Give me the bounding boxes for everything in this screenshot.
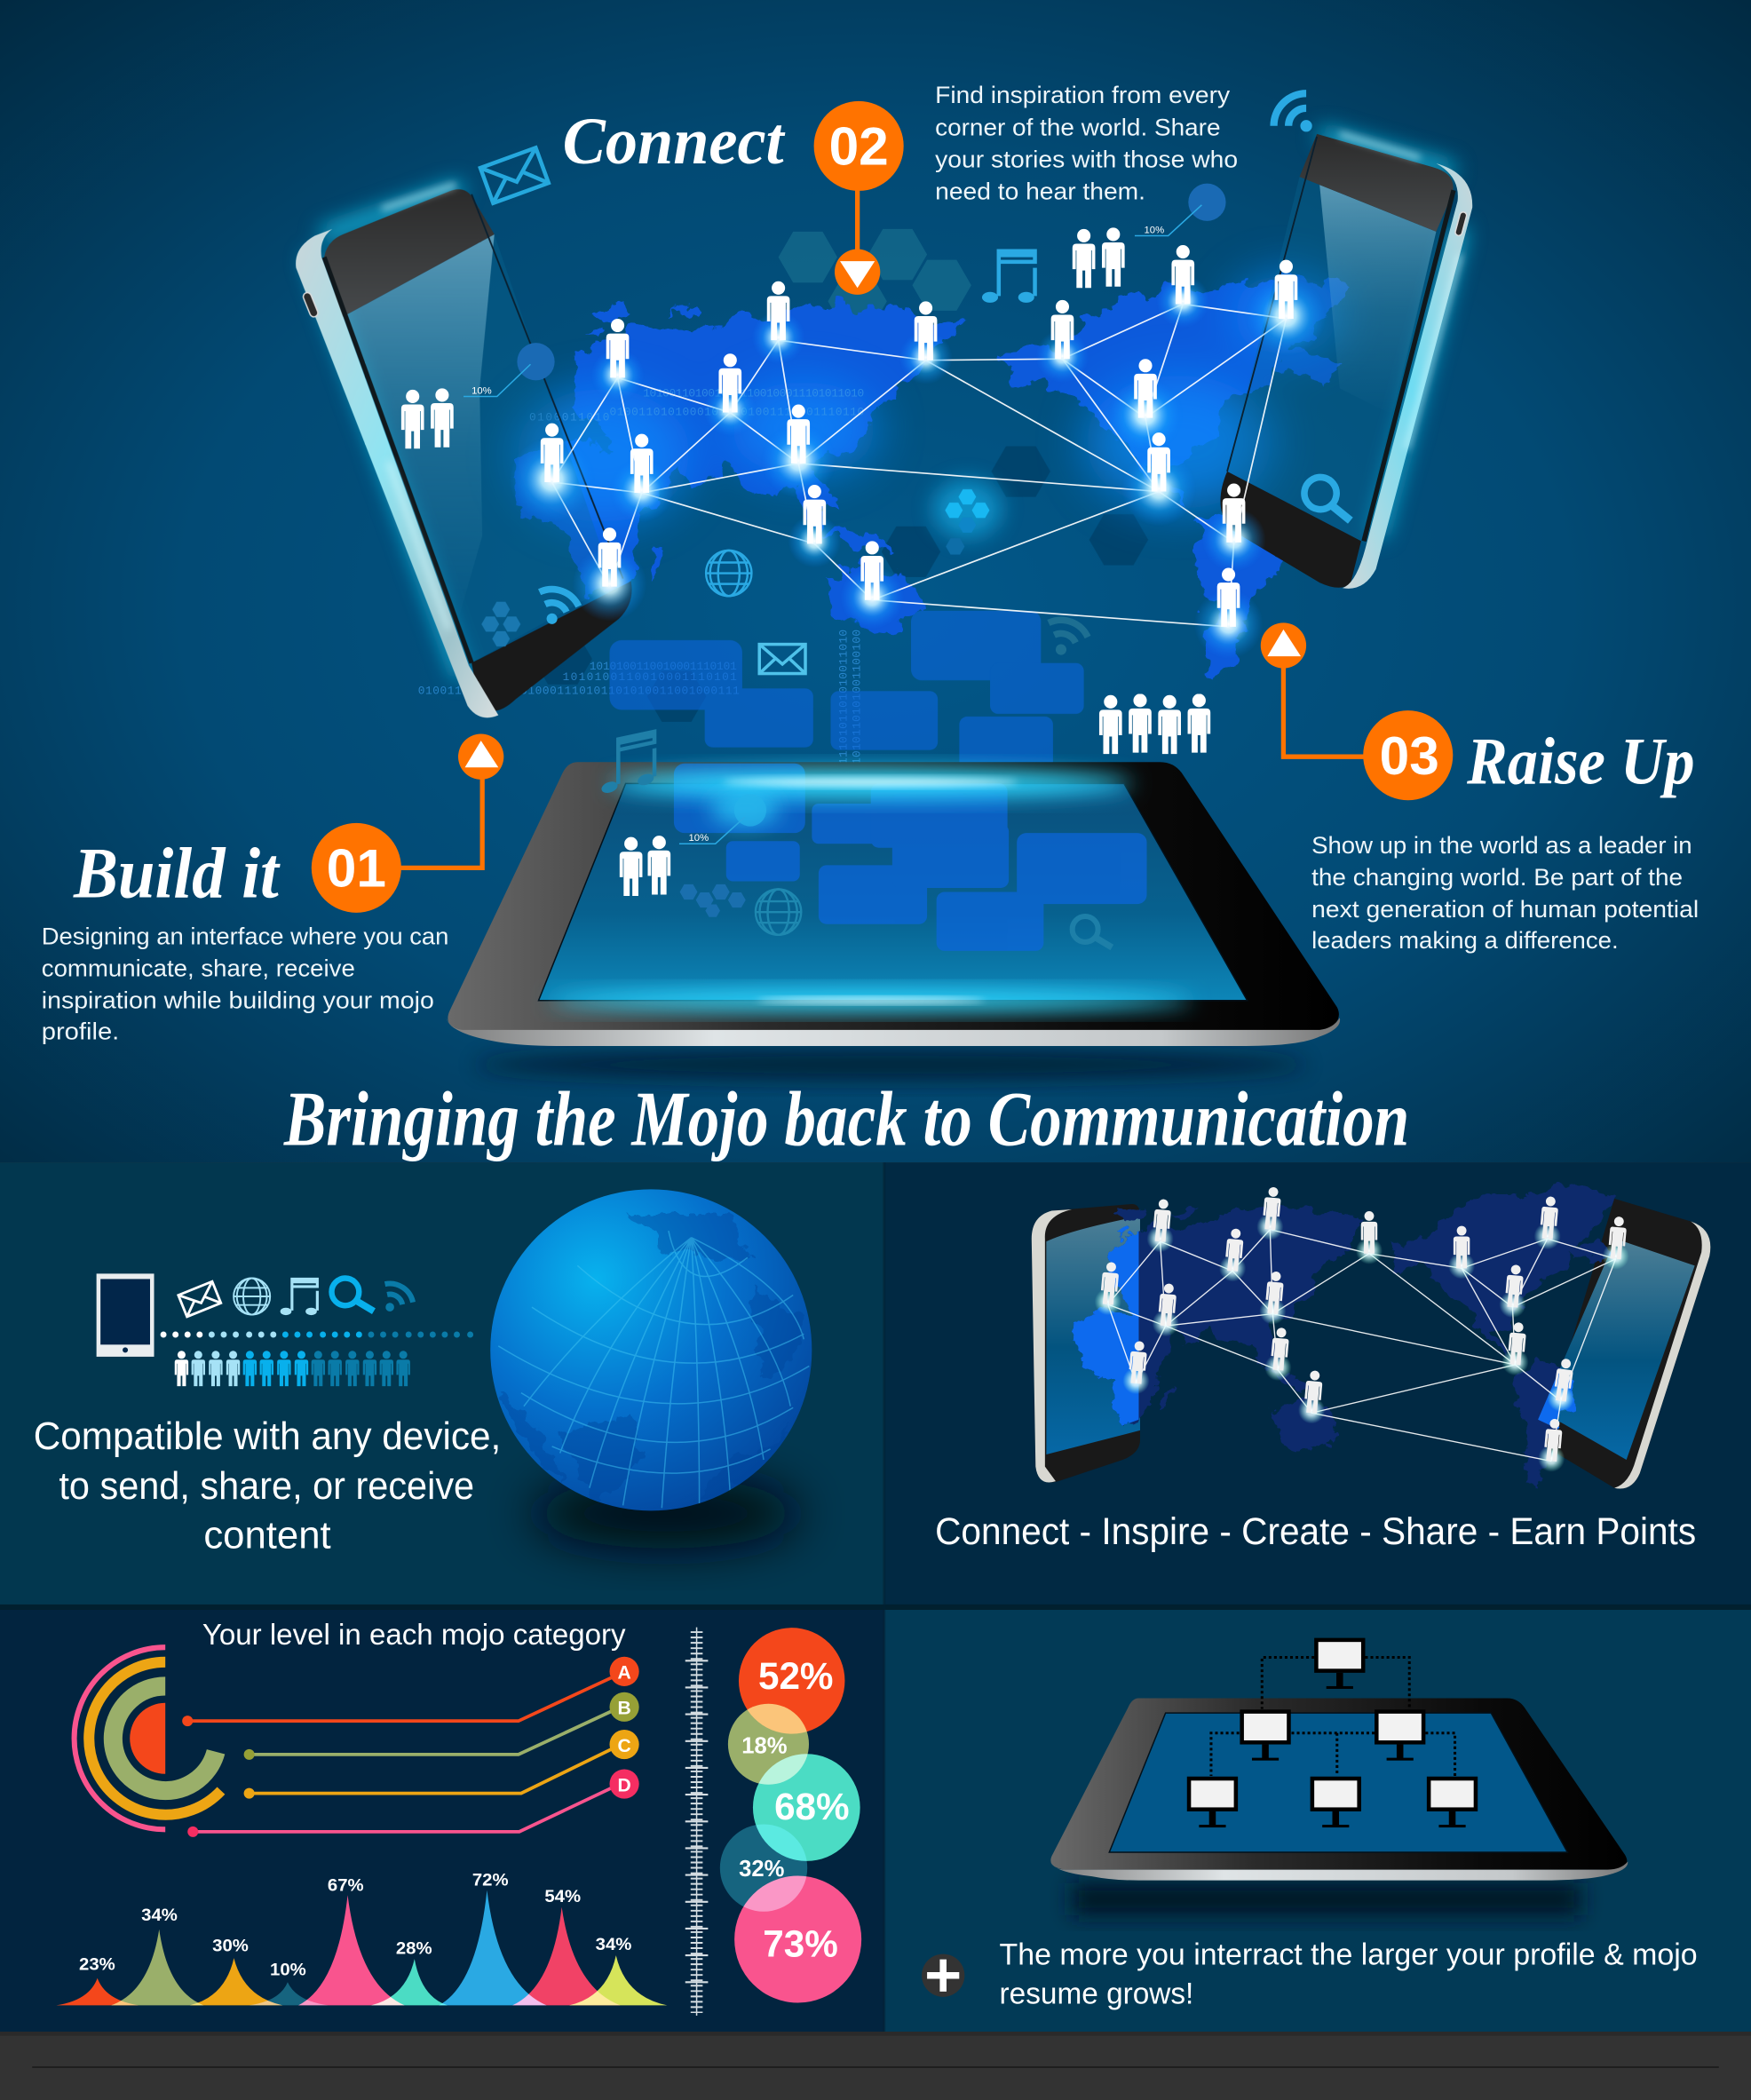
icon: music light [281,1278,319,1315]
icon: wifi left phone [535,580,581,626]
peak labels: 34% [596,1935,631,1954]
hexagon decorations [779,229,971,327]
binary code: 1010100110010001110101 [563,670,737,684]
heading: Connect: Connect [563,105,786,178]
bubble labels: 32% [739,1857,785,1882]
right phone [1220,134,1472,589]
icon: wifi right phone [1274,93,1312,131]
text: Build it description [42,923,448,1044]
left phone bottom band [471,582,632,711]
right phone side button [1454,211,1467,236]
small world map dark [1072,1185,1620,1486]
right phone bottom band [1220,472,1361,588]
tablet rim [1050,1862,1628,1881]
left phone right edge [471,194,623,579]
text: profile description: The more you interract the larger your profile & mojo [1000,1938,1698,1972]
dim dark hexagons [534,446,1148,722]
people pair on left phone [401,388,454,448]
heading: your level: Your level in each mojo category [202,1619,626,1652]
left phone silver edge [296,229,498,717]
tablet cards [674,764,1147,951]
small left phone [1032,1204,1140,1482]
legend line D [187,1769,639,1837]
tablet glow bottom [550,990,1192,1011]
icon: globe center [706,551,751,596]
text: Connect description [935,82,1238,205]
people pair on tablet [620,836,670,896]
peak labels: 54% [544,1887,581,1906]
peak labels: 28% [396,1939,432,1959]
icon: music top [982,250,1037,303]
binary code [418,386,864,857]
left phone side button [302,291,319,318]
text: Connect description: your stories with those who [935,147,1238,173]
text: Build it description: communicate, share, receive [42,955,355,982]
tablet glow bottom core [757,998,985,1003]
ten percent marker tablet: 10% [689,833,709,844]
right phone glass reflection [1319,185,1436,416]
bubble labels [739,1655,850,1965]
legend line B [244,1692,639,1760]
icon: wifi teal [381,1280,414,1312]
hero section [0,0,1751,1162]
legend line D: D [617,1775,631,1795]
text: Raise Up description: Show up in the world as a leader in [1311,832,1692,859]
hero background [0,0,1751,1162]
peak labels: 72% [472,1871,509,1890]
peak labels [79,1871,631,1980]
ruler scale [685,1628,708,2016]
legend line C: C [617,1736,631,1756]
people pair top [1073,227,1125,288]
text: Raise Up description [1311,832,1699,954]
icon: magnifier tablet [1073,916,1112,947]
floating blue cards [610,611,1084,770]
binary code: 01001101010001010101001110001110110 [610,406,864,419]
network people [541,245,1297,627]
peak chart [56,1890,667,2005]
text: Connect description: corner of the world. Share [935,114,1221,140]
ten percent marker right: 10% [1145,225,1164,235]
tablet shadow [476,1049,1306,1081]
small connection lines [1108,1230,1616,1462]
hexagon cluster left phone [481,602,520,646]
left phone edge highlight [382,185,456,630]
monitors [1189,1640,1476,1827]
radial rings chart [75,1647,221,1829]
tablet shadow [1072,1883,1581,1915]
text: Raise Up description: the changing world. Be part of the [1311,864,1683,891]
text: Build it description: inspiration while building your mojo [42,987,434,1014]
text: Build it description: Designing an interface where you can [42,923,448,949]
peak labels: 23% [79,1955,115,1975]
node glows [509,274,1327,659]
bubble labels: 68% [774,1786,850,1827]
right phone screen [1227,177,1436,541]
heading: Raise Up: Raise Up [1466,725,1695,798]
callout 01 [312,734,503,913]
callout 03: 03 [1380,725,1439,786]
connection lines [552,304,1286,627]
globe [490,1189,812,1510]
right phone left edge [1227,137,1317,472]
panel background [884,1610,1751,2032]
text: Raise Up description: next generation of human potential [1311,896,1699,923]
tablet rim [446,1018,1340,1046]
globe shadow [532,1478,800,1549]
peak labels: 34% [141,1906,178,1925]
tablet frame [448,762,1339,1031]
panel: connect network [884,1162,1751,1607]
right phone edge highlight [1340,134,1461,448]
text: Connect description: Find inspiration from every [935,82,1231,108]
peak labels: 30% [212,1937,249,1956]
peak labels: 67% [328,1876,364,1896]
tablet glow top core [724,778,1018,786]
legend line A: A [617,1663,631,1684]
ten percent marker right [1135,184,1226,235]
bubble chart [720,1628,861,2002]
world map [516,274,1353,677]
panel background [884,1162,1751,1607]
tablet card sparkle [710,793,780,825]
left phone glow [311,187,463,677]
right phone glow [1319,134,1461,535]
bubble labels: 73% [763,1923,838,1965]
tablet frame [1050,1699,1627,1870]
small world map bright left [1072,1225,1138,1426]
right phone inner dark edge [1364,190,1454,541]
bubble labels: 18% [741,1733,788,1758]
dotted line [161,1332,473,1337]
legend line B: B [617,1699,631,1719]
ten percent marker tablet [679,794,766,844]
icon: envelope center [759,645,805,674]
text: profile description: resume grows! [1000,1977,1193,2010]
right phone top band [1300,134,1454,232]
ten percent marker left [464,343,555,396]
panel: profile growth [884,1610,1751,2032]
icon: envelope on left phone [480,147,549,203]
icon: envelope white [178,1281,221,1317]
left phone top band [324,189,495,317]
legend line A [182,1657,639,1726]
tablet screen [1109,1713,1567,1852]
text: connect tagline: Connect - Inspire - Create - Share - Earn Points [935,1510,1696,1552]
binary code: 1010011010010101100100011101011010 [643,386,864,400]
text: Build it description: profile. [42,1018,119,1044]
icon: plus [922,1954,964,1997]
binary code: 0100011010 [529,411,610,424]
binary code: 10100110010001110101101010011010 [837,630,851,857]
binary code: 1010100110010001110101 [590,660,737,673]
binary code: 01001110100110010001110101101010011001000111 [418,684,740,697]
icon: magnifier right phone [1302,475,1356,520]
footer bar [0,2032,1751,2100]
left phone [296,185,632,717]
text: Connect description: need to hear them. [935,178,1145,205]
tablet glow top [610,769,1132,798]
panel: mojo categories [0,1610,884,2032]
ten percent marker left: 10% [471,385,492,396]
icon: wifi center [1043,610,1090,657]
binary code: 01011001000111010110101001100100 [851,630,864,857]
small right phone [1538,1199,1710,1489]
map highlights [516,274,1340,522]
panel separators [0,1162,1751,2032]
bubble labels: 52% [758,1655,833,1697]
small world map bright right [1538,1252,1611,1430]
hexagon cluster bright [945,489,989,555]
left phone screen [342,234,614,663]
text: compatible description: to send, share, or receive [59,1464,474,1508]
panel background [0,1162,884,1607]
callout 02 [814,101,904,295]
text: compatible description: Compatible with any device, [34,1415,501,1458]
panel: compatible devices [0,1162,884,1607]
callout 02: 02 [829,116,889,177]
hexagon cluster glow [932,479,1002,538]
group of four people [1099,693,1210,754]
legend line C [244,1730,639,1799]
panel background [0,1610,884,2032]
heading: Build it: Build it [73,833,281,914]
tablet [446,762,1340,1046]
icon: globe light [234,1279,270,1315]
tablet outline icon [97,1273,154,1357]
dotted connectors [1211,1658,1455,1776]
tablet screen [539,783,1248,1001]
icon: globe tablet [756,890,801,935]
text: profile description [1000,1938,1698,2010]
hexagon cluster tablet [680,884,746,917]
left phone glass reflection [342,234,495,630]
row of people [175,1351,410,1386]
icon: music center [601,729,656,795]
peak labels: 10% [270,1961,306,1980]
main title: Bringing the Mojo back to Communication [283,1076,1409,1162]
right phone silver edge [1343,163,1472,589]
text: compatible description [34,1415,501,1557]
text: Raise Up description: leaders making a difference. [1311,927,1619,954]
icon: magnifier cyan [332,1279,374,1312]
text: compatible description: content [203,1514,331,1557]
callout 03 [1261,622,1453,800]
small node glows [1095,1214,1629,1472]
small network people [1100,1186,1628,1462]
callout 01: 01 [327,837,386,898]
left phone inner dark edge [324,258,471,663]
